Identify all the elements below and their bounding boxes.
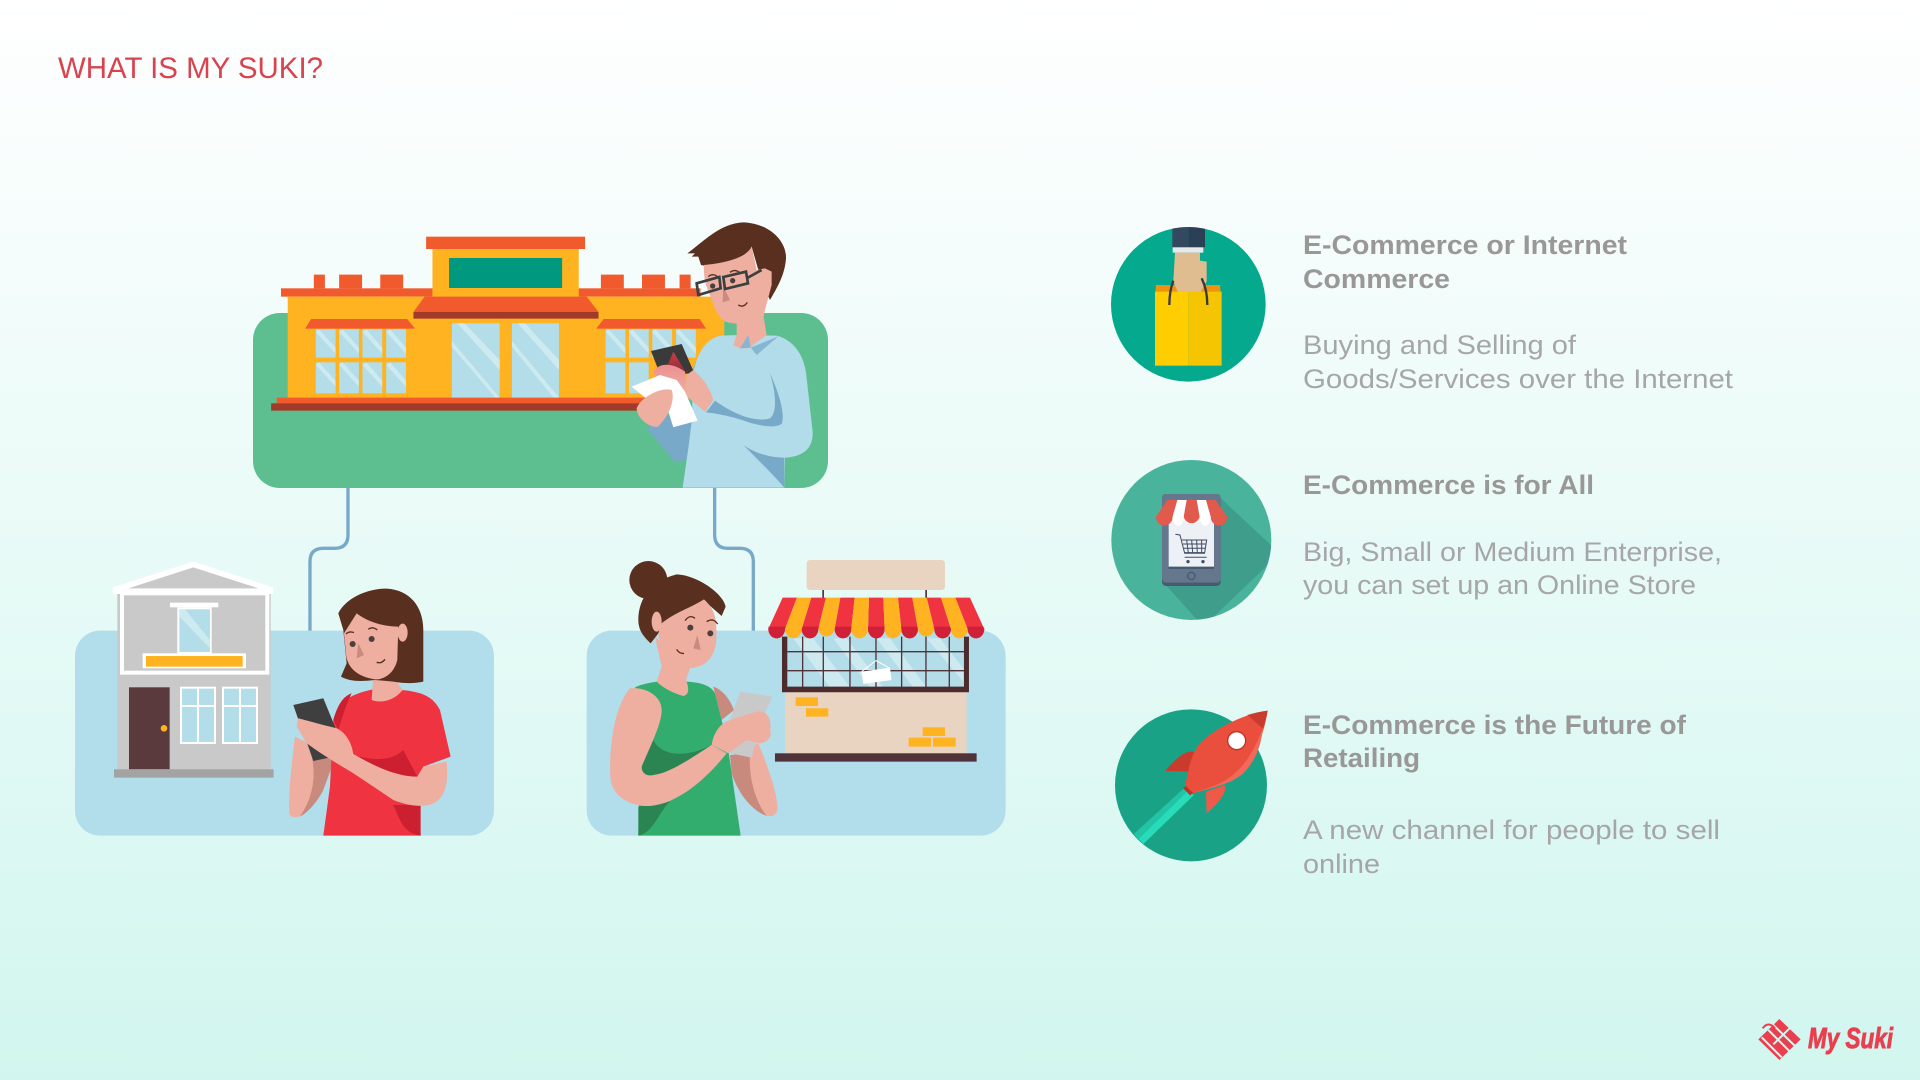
icon: mobile storefront with cart: [1111, 460, 1280, 627]
illustration: man with glasses and phone: [632, 222, 813, 488]
text block: e-commerce or internet commerce: Buying and Selling of: [1303, 330, 1577, 360]
illustration: woman in green dress with phone: [610, 561, 778, 836]
text block: e-commerce is the future of retailing: Retailing: [1303, 743, 1420, 773]
text block: e-commerce or internet commerce: Goods/Services over the Internet: [1303, 364, 1734, 394]
blue panel background: [587, 631, 1006, 836]
logo: My Suki: My Suki: [1808, 1023, 1894, 1055]
blue panel background: [75, 631, 494, 836]
text block: e-commerce or internet commerce: E-Commerce or Internet: [1303, 230, 1627, 260]
icon: rocket: [1115, 709, 1268, 861]
illustration: small shop with striped awning: [768, 560, 984, 762]
illustration: woman in red shirt with phone: [289, 589, 451, 836]
text block: e-commerce is for all: you can set up an Online Store: [1303, 570, 1696, 600]
logo: My Suki: [1758, 1019, 1894, 1060]
panel: small shop owner: [587, 560, 1006, 836]
text block: e-commerce is the future of retailing: [1303, 710, 1720, 879]
panel: large enterprise store with shopper: [253, 222, 828, 488]
text block: e-commerce is the future of retailing: E-Commerce is the Future of: [1303, 710, 1687, 740]
illustration: large store building: [271, 237, 724, 411]
text block: e-commerce is the future of retailing: A new channel for people to sell: [1303, 815, 1720, 845]
panel: home seller: [75, 562, 494, 836]
text block: e-commerce is for all: [1303, 470, 1722, 600]
text block: e-commerce or internet commerce: [1303, 230, 1734, 394]
illustration: house: [113, 562, 274, 778]
arrow: connector from large store to small shop: [715, 487, 753, 632]
text block: e-commerce is the future of retailing: online: [1303, 849, 1380, 879]
text block: e-commerce is for all: Big, Small or Medium Enterprise,: [1303, 537, 1722, 567]
icon: hand holding shopping bag: [1111, 225, 1266, 382]
text block: e-commerce or internet commerce: Commerce: [1303, 264, 1450, 294]
title: WHAT IS MY SUKI?: [58, 52, 323, 85]
text block: e-commerce is for all: E-Commerce is for All: [1303, 470, 1594, 500]
arrow: connector from large store to home seller: [310, 487, 348, 632]
green panel background: [253, 313, 828, 488]
